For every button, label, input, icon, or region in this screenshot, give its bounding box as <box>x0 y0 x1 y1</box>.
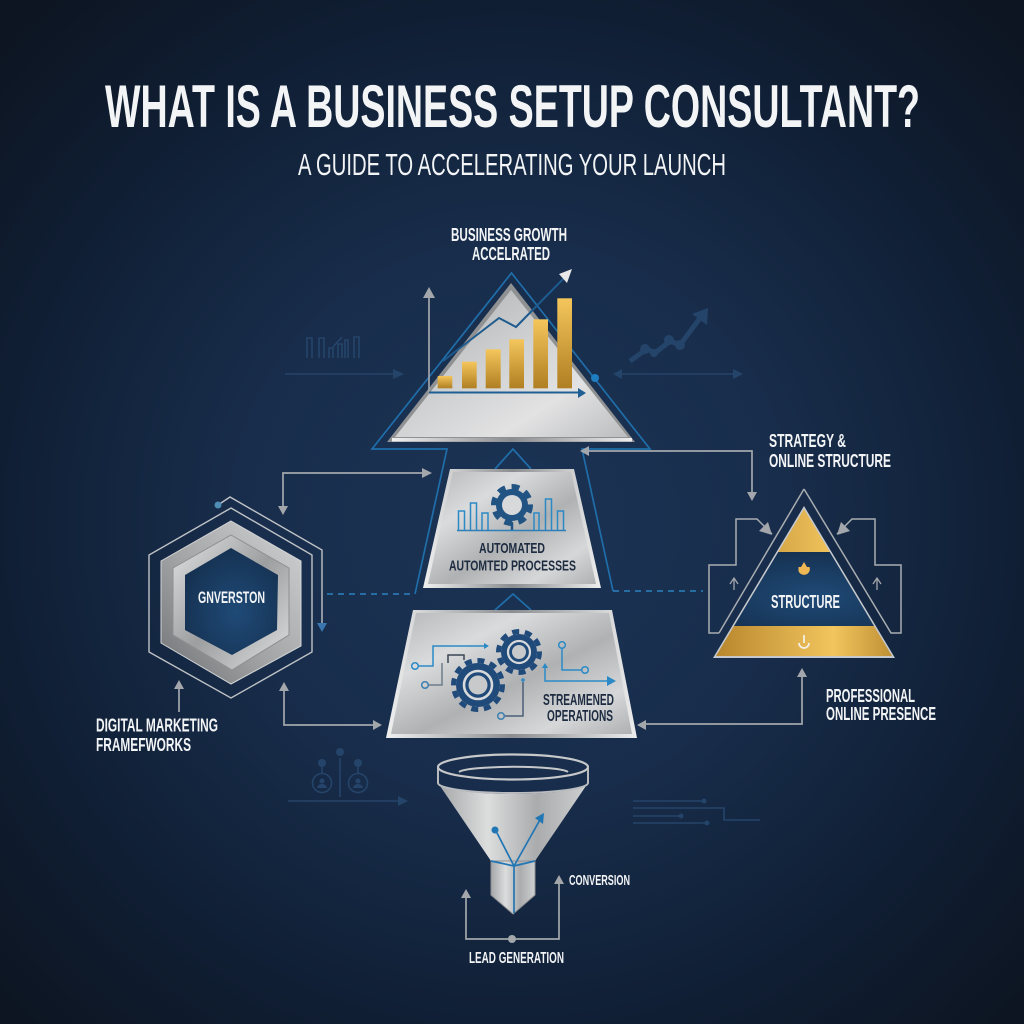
icon: funnel arrows <box>491 813 544 913</box>
panel: automated processes: AUTOMATED <box>479 540 545 557</box>
blue outer frame of central pyramid <box>327 273 703 610</box>
label: digital marketing: DIGITAL MARKETING <box>96 716 218 736</box>
label: business growth: BUSINESS GROWTH <box>451 225 567 245</box>
label: professional presence <box>826 686 936 724</box>
icon: gear and bars <box>457 487 566 530</box>
label: digital marketing <box>96 680 218 755</box>
label: conversion: CONVERSION <box>569 873 630 889</box>
panel: automated processes: AUTOMTED PROCESSES <box>449 558 576 574</box>
faint background icon: bars and arrow left <box>285 337 404 379</box>
panel: growth triangle <box>387 269 635 442</box>
label: digital marketing: FRAMEFWORKS <box>96 735 191 755</box>
label: strategy: STRATEGY & <box>769 431 846 451</box>
label: business growth: ACCELRATED <box>472 244 550 264</box>
faint background icon: people and arrow <box>288 748 408 806</box>
funnel <box>438 754 588 914</box>
faint background icon: data lines <box>633 798 760 826</box>
arrow: hexagon to operations <box>279 682 382 730</box>
panel: streamlined operations <box>386 610 637 738</box>
subtitle: A GUIDE TO ACCELERATING YOUR LAUNCH <box>298 147 726 182</box>
panel: structure pyramid: STRUCTURE <box>771 592 840 612</box>
label: professional presence: ONLINE PRESENCE <box>826 704 936 724</box>
label: business growth <box>451 225 567 264</box>
arrow: hexagon outer loop <box>214 497 327 632</box>
panel: streamlined operations: STREAMENED <box>543 692 614 709</box>
label: strategy: ONLINE STRUCTURE <box>769 451 891 471</box>
faint background icon: trend arrow right <box>613 308 743 379</box>
panel: structure pyramid <box>709 489 901 658</box>
arrow: triangle to structure <box>580 446 757 501</box>
label: lead generation: LEAD GENERATION <box>469 950 564 967</box>
icon: gold bowl <box>798 562 810 575</box>
label: strategy <box>769 431 891 471</box>
growth chart <box>423 269 586 398</box>
panel: conversion hexagon: GNVERSTON <box>198 589 265 607</box>
arrow: hexagon to automated <box>278 468 432 515</box>
icon: gears and circuit <box>412 632 616 719</box>
arrow: operations to structure <box>637 668 807 730</box>
panel: streamlined operations: OPERATIONS <box>547 708 613 725</box>
label: professional presence: PROFESSIONAL <box>826 686 915 706</box>
arrow: lead generation bracket <box>461 875 564 943</box>
panel: automated processes <box>423 469 601 588</box>
icon: white bowl <box>799 635 809 648</box>
panel: conversion hexagon <box>149 508 312 698</box>
